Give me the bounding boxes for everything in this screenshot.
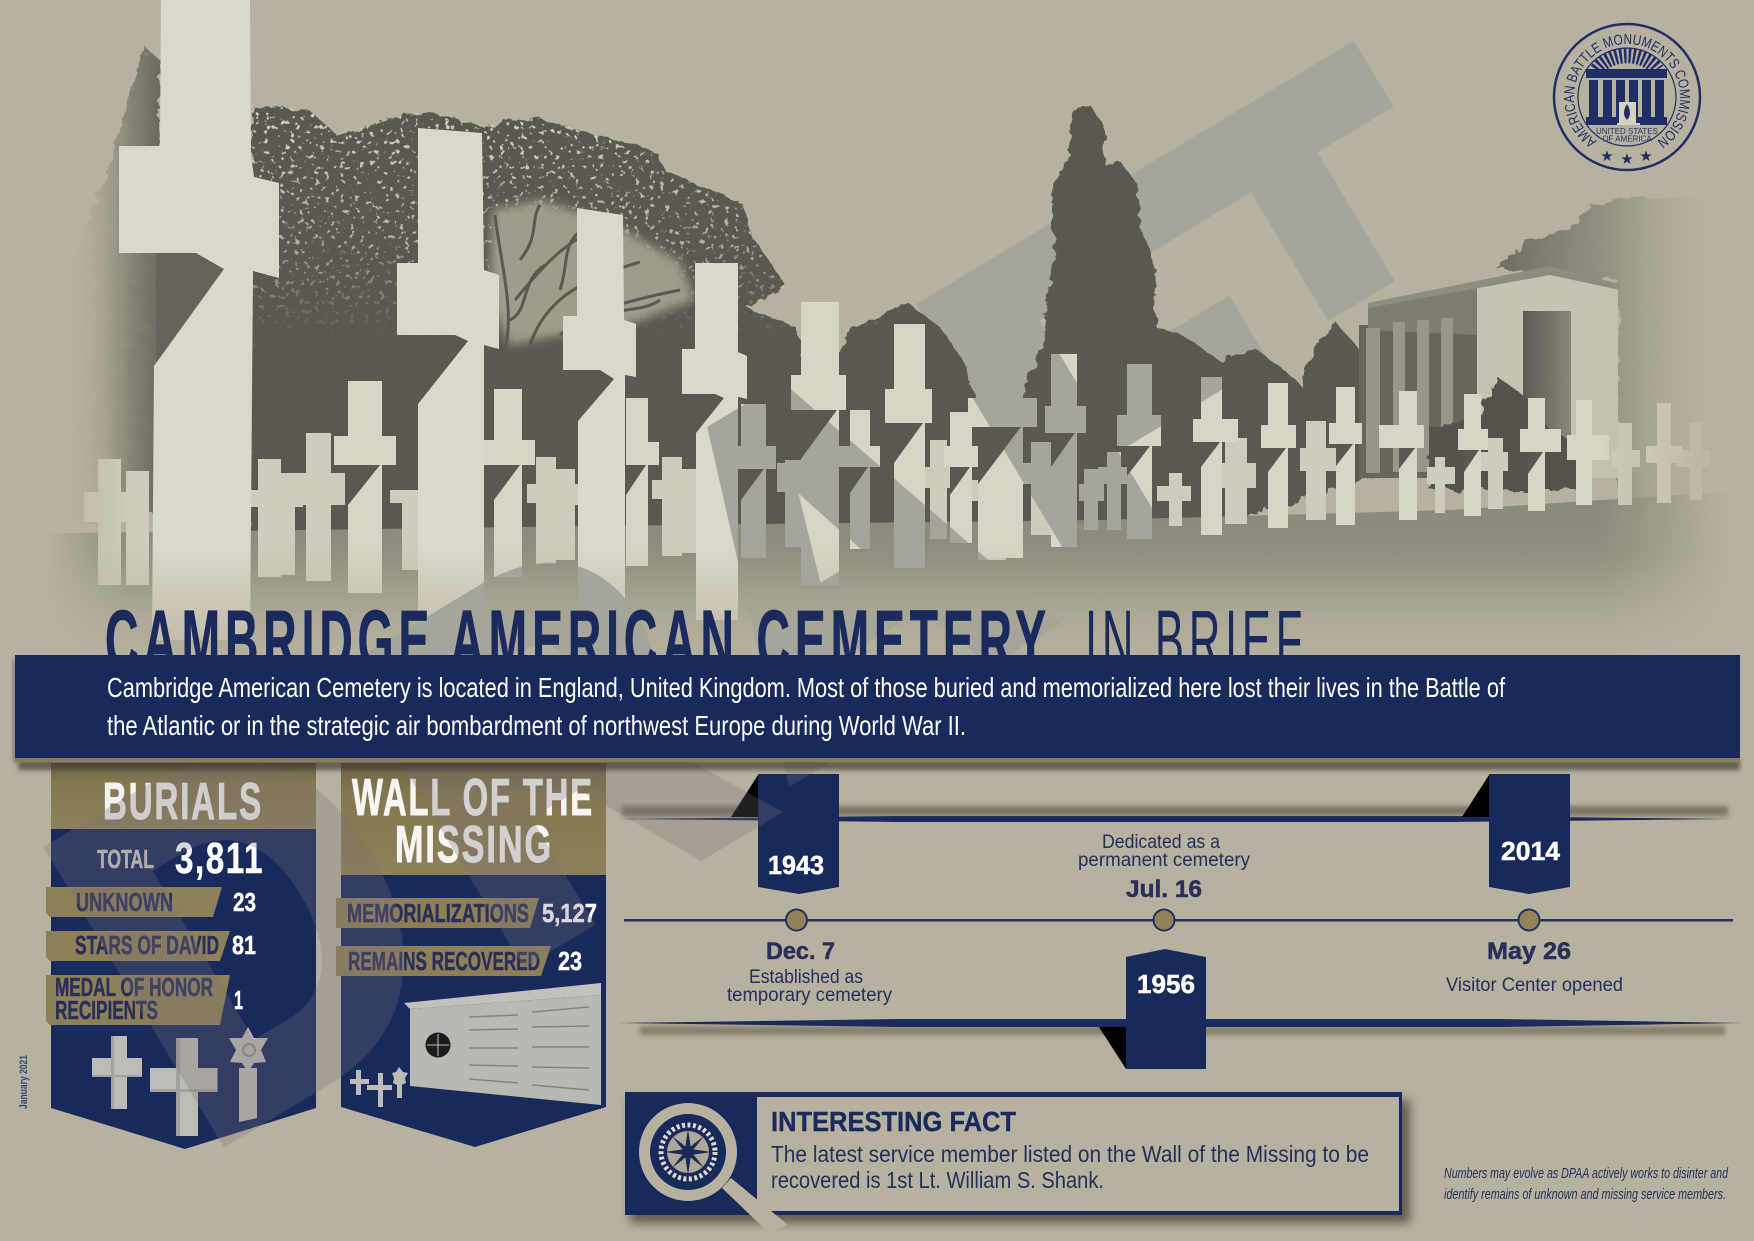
date note: January 2021 (18, 1055, 30, 1109)
ribbon: 1943 (731, 774, 839, 894)
stat: remains recovered: 23 (558, 946, 582, 976)
shadows below cross arms (348, 410, 1543, 505)
event: Jul. 16 (1078, 832, 1250, 903)
marker: Dec. 7 (786, 910, 807, 930)
faded tree at left (50, 48, 160, 530)
intro banner (12, 655, 1740, 770)
callout: interesting fact: INTERESTING FACT (771, 1106, 1016, 1137)
icon: magnifying glass with emblem (639, 1103, 788, 1232)
seal: American Battle Monuments Commission: ★ (1639, 148, 1653, 165)
heading: burials: BURIALS (103, 773, 263, 831)
stat: remains recovered: REMAINS RECOVERED (348, 946, 540, 976)
hero photo: cemetery crosses and trees (0, 0, 1754, 655)
ribbon: 2014 (1462, 774, 1570, 894)
stat: unknown: 23 (233, 887, 256, 917)
right faded tree (1496, 198, 1730, 510)
ribbon: 1956: 1956 (1137, 969, 1195, 999)
watermark: DRAFT over the photo: A (566, 247, 1104, 861)
timeline (618, 774, 1742, 1069)
watermark: DRAFT over the photo: R (281, 439, 819, 1053)
event: Dec. 7: temporary cemetery (727, 985, 892, 1006)
heading: wall of the missing: MISSING (395, 816, 553, 874)
seal: American Battle Monuments Commission: OF AMERICA (1602, 134, 1652, 144)
event: May 26: May 26 (1487, 938, 1571, 965)
ribbon: 2014: 2014 (1501, 836, 1561, 866)
stat: total: TOTAL (97, 844, 154, 874)
ground (0, 490, 1754, 655)
callout: interesting fact: recovered is 1st Lt. William S. Shank. (771, 1167, 1104, 1193)
tree line silhouette (250, 105, 1400, 540)
stat: total (97, 834, 264, 883)
event: Dec. 7: Established as (749, 967, 863, 988)
heading: wall of the missing: WALL OF THE (352, 769, 594, 827)
icon: wall with names (350, 983, 601, 1107)
seal: American Battle Monuments Commission: ★ (1600, 148, 1614, 165)
event: Jul. 16: Jul. 16 (1126, 876, 1202, 903)
event: Dec. 7 (727, 938, 892, 1006)
watermark: DRAFT over the photo: F (852, 80, 1386, 692)
stat: memorializations: 5,127 (542, 898, 597, 928)
large foreground crosses (119, 0, 747, 640)
event: May 26 (1446, 938, 1623, 996)
memorial building (1359, 266, 1620, 478)
ribbon: 1956 (1099, 949, 1206, 1069)
leaf speckles in the tree crown (252, 105, 878, 331)
fade overlays (1600, 0, 1730, 655)
seal: American Battle Monuments Commission: AMERICAN BATTLE MONUMENTS COMMISSION (1564, 34, 1690, 148)
stat: memorializations: MEMORIALIZATIONS (347, 898, 529, 928)
stat: stars of david: 81 (232, 930, 256, 960)
seal: American Battle Monuments Commission: ★ (1620, 151, 1634, 168)
lower timeline band (618, 1019, 1742, 1035)
dark shrubs in front of the building (1430, 375, 1590, 490)
watermark: DRAFT over the lower panels: A (566, 247, 1104, 861)
sky gap with branches (490, 200, 694, 350)
stat: medal of honor recipients (46, 972, 243, 1025)
icon: headstones (92, 1027, 268, 1136)
callout: interesting fact (625, 1092, 1410, 1232)
intro banner: the Atlantic or in the strategic air bombardment of northwest Europe during World War II. (107, 710, 966, 741)
left edge fade (0, 0, 130, 655)
ribbon: 1943: 1943 (768, 850, 824, 880)
stat: stars of david: STARS OF DAVID (75, 930, 219, 960)
upper timeline band (618, 806, 1730, 822)
callout: interesting fact: The latest service member listed on the Wall of the Missing to be (771, 1141, 1369, 1167)
event: Dec. 7: Dec. 7 (766, 938, 835, 965)
stat: medal of honor recipients: MEDAL OF HONOR (55, 972, 213, 1002)
event: Jul. 16: Dedicated as a (1102, 832, 1220, 853)
watermark: DRAFT over the lower panels: R (281, 439, 819, 1053)
rows of small distant crosses (84, 421, 1710, 585)
event: Jul. 16: permanent cemetery (1078, 850, 1250, 871)
footnote (1444, 1165, 1728, 1203)
stat: medal of honor recipients: 1 (234, 985, 243, 1015)
stat: unknown (46, 887, 256, 917)
watermark: DRAFT over the lower panels (44, 768, 820, 1148)
seal: American Battle Monuments Commission: UNITED STATES (1596, 127, 1658, 136)
title: IN BRIEF (1085, 593, 1307, 687)
stat: unknown: UNKNOWN (76, 887, 173, 917)
rows of mid-distance crosses (334, 302, 1682, 593)
stat: total: 3,811 (175, 834, 264, 883)
heading: wall of the missing (352, 769, 594, 874)
marker: Jul. 16 (1154, 910, 1174, 930)
marker: May 26 (1518, 910, 1540, 930)
panel: wall of the missing (336, 763, 606, 1147)
panel: burials (46, 763, 316, 1149)
dark area behind the first cross (156, 230, 260, 520)
watermark: DRAFT over the photo (368, 41, 1395, 655)
event: May 26: Visitor Center opened (1446, 975, 1623, 996)
middle timeline line (624, 919, 1733, 922)
stat: medal of honor recipients: RECIPIENTS (55, 995, 158, 1025)
